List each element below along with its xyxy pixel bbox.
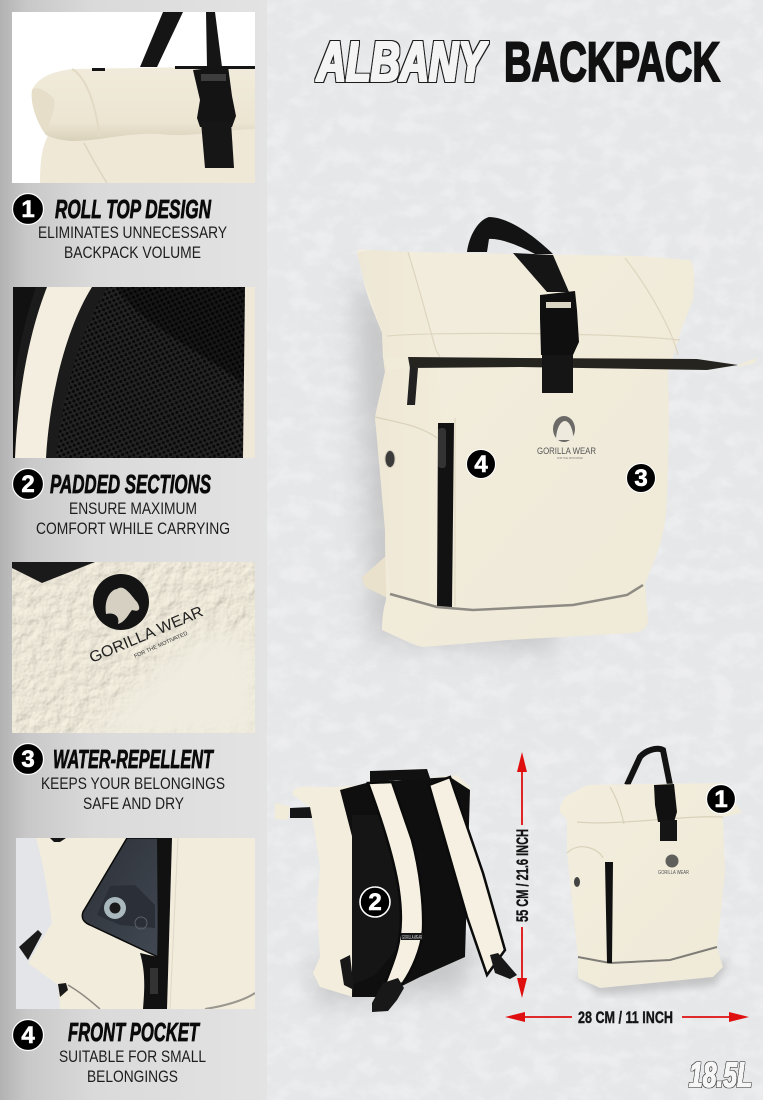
text: padded sections description: ENSURE MAXIMUM	[69, 500, 197, 518]
panel: front pocket	[12, 838, 255, 1086]
heading: front pocket: FRONT POCKET	[68, 1017, 200, 1047]
heading: water-repellent: WATER-REPELLENT	[53, 744, 214, 774]
dimension arrow: width	[505, 1008, 749, 1027]
text: roll top description	[38, 224, 227, 262]
back panel	[340, 777, 470, 997]
logo	[658, 854, 689, 876]
back tab	[362, 556, 392, 600]
illustration: main backpack front view	[355, 217, 757, 650]
badge 4	[12, 1020, 44, 1050]
roll side tab	[275, 803, 290, 820]
heading: padded sections: PADDED SECTIONS	[50, 469, 211, 499]
shoulder strap left	[368, 782, 423, 997]
front zipper	[437, 423, 454, 607]
badge 3 on bag	[626, 464, 656, 492]
reflective strip	[390, 585, 643, 610]
panel: roll top design	[12, 12, 256, 262]
side button	[385, 450, 395, 468]
body	[560, 783, 742, 988]
text: water-repellent description	[41, 775, 225, 813]
text: padded sections description	[36, 500, 230, 538]
badge 4 on bag: 4	[474, 451, 488, 478]
handle	[467, 217, 553, 254]
photo: mesh padding	[13, 287, 255, 458]
dimension arrow: height	[513, 752, 532, 998]
logo	[537, 416, 596, 460]
badge 4: 4	[21, 1022, 35, 1049]
badge 2	[12, 468, 44, 500]
photo: water droplets on fabric: GORILLA WEAR	[87, 603, 206, 667]
heading: roll top design: ROLL TOP DESIGN	[55, 194, 212, 224]
dimension arrow: width: 28 CM / 11 INCH	[578, 1008, 673, 1027]
badge 1	[12, 194, 44, 224]
zipper	[605, 862, 613, 963]
strap label: GORILLA WEAR	[402, 935, 422, 941]
title	[316, 30, 720, 94]
text: front pocket description	[59, 1048, 206, 1086]
badge 3: 3	[21, 746, 35, 773]
photo: roll top closure	[12, 12, 256, 183]
panel: water-repellent	[12, 562, 260, 813]
shoulder strap right	[429, 777, 505, 975]
logo: GORILLA WEAR	[537, 446, 596, 456]
text: roll top description: ELIMINATES UNNECESSARY	[38, 224, 227, 242]
mesh area	[352, 815, 402, 985]
top zipper	[408, 357, 738, 370]
text: roll top description: BACKPACK VOLUME	[64, 244, 201, 262]
badge 1 on bag: 1	[714, 786, 728, 813]
badge 3 on bag: 3	[634, 465, 648, 492]
text: front pocket description: BELONGINGS	[87, 1068, 178, 1086]
illustration: backpack back view	[275, 769, 517, 1012]
buckle strap	[513, 253, 569, 292]
strap buckles	[340, 955, 404, 1012]
photo: water droplets on fabric	[12, 562, 260, 740]
dimension arrow: height: 55 CM / 21.6 INCH	[513, 829, 532, 922]
badge 2 on bag	[360, 887, 390, 917]
text: front pocket description: SUITABLE FOR SMALL	[59, 1048, 206, 1066]
panel: padded sections	[12, 287, 255, 538]
text: water-repellent description: SAFE AND DRY	[83, 795, 184, 813]
photo: water droplets on fabric: FOR THE MOTIVATED	[133, 631, 189, 660]
backpack body	[357, 249, 694, 647]
badge 3	[12, 744, 44, 774]
badge 1 on bag	[706, 784, 736, 814]
logo: FOR THE MOTIVATED	[557, 456, 584, 460]
badge 4 on bag	[466, 450, 496, 478]
handle	[627, 749, 670, 785]
top handle	[370, 769, 431, 783]
body	[292, 775, 470, 997]
photo: phone in front pocket	[16, 838, 255, 1009]
logo: GORILLA WEAR	[658, 870, 689, 876]
side button	[574, 877, 580, 887]
strap label	[401, 933, 423, 941]
badge 2: 2	[21, 471, 35, 498]
buckle	[654, 784, 677, 822]
text: padded sections description: COMFORT WHILE CARRYING	[36, 520, 230, 538]
title: ALBANY	[316, 30, 489, 94]
badge 1: 1	[21, 196, 35, 223]
side panel shading	[357, 250, 455, 607]
illustration: backpack front small	[560, 749, 742, 995]
text: water-repellent description: KEEPS YOUR BELONGINGS	[41, 775, 225, 793]
badge 2 on bag: 2	[368, 889, 382, 916]
